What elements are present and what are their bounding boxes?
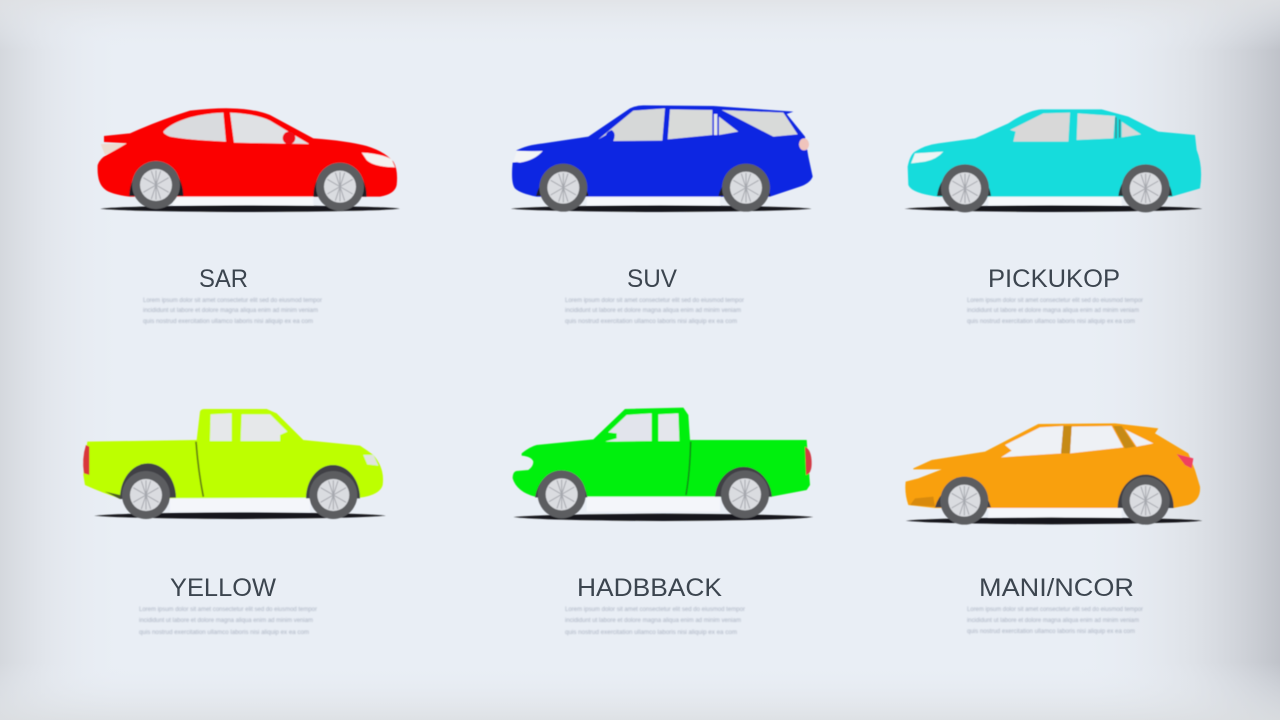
heading: YELLOW: YELLOW — [170, 574, 276, 602]
car: yellow pickup — [83, 409, 386, 519]
text block: MANIINCOR description: quis nostrud exercitation ullamco laboris nisi aliquip ex ea com — [967, 628, 1135, 635]
heading: SAR: SAR — [199, 265, 248, 293]
panel: orange hatchback — [905, 423, 1202, 635]
text block: YELLOW description — [139, 606, 318, 636]
panel: blue SUV — [511, 105, 813, 325]
text block: HADBBACK description: incididunt ut labore et dolore magna aliqua enim ad minim veniam — [565, 617, 741, 624]
text block: PICKUKOP description: incididunt ut labore et dolore magna aliqua enim ad minim veniam — [967, 307, 1139, 314]
text block: PICKUKOP description: quis nostrud exercitation ullamco laboris nisi aliquip ex ea com — [967, 318, 1135, 325]
heading: PICKUKOP: PICKUKOP — [988, 265, 1120, 293]
text block: SAR description — [143, 297, 323, 325]
car: red sedan — [98, 108, 400, 212]
text block: SUV description: incididunt ut labore et dolore magna aliqua enim ad minim veniam — [565, 307, 741, 314]
text block: YELLOW description: quis nostrud exercitation ullamco laboris nisi aliquip ex ea com — [139, 629, 309, 636]
car: cyan sedan — [904, 109, 1202, 212]
panel: red sedan — [98, 108, 400, 325]
text block: SAR description: Lorem ipsum dolor sit amet consectetur elit sed do eiusmod tempor — [143, 297, 323, 304]
text block: PICKUKOP description: Lorem ipsum dolor sit amet consectetur elit sed do eiusmod tempor — [967, 297, 1144, 304]
text block: YELLOW description: Lorem ipsum dolor sit amet consectetur elit sed do eiusmod tempor — [139, 606, 318, 613]
text block: HADBBACK description — [565, 606, 746, 636]
text block: MANIINCOR description — [967, 606, 1144, 635]
panel: yellow pickup — [83, 409, 386, 636]
car: orange hatchback — [905, 423, 1202, 525]
panel: green pickup — [513, 408, 813, 636]
car: blue SUV — [511, 105, 813, 212]
text block: MANIINCOR description: Lorem ipsum dolor sit amet consectetur elit sed do eiusmod tempor — [967, 606, 1144, 613]
text block: HADBBACK description: Lorem ipsum dolor sit amet consectetur elit sed do eiusmod tempor — [565, 606, 746, 613]
text block: SAR description: incididunt ut labore et dolore magna aliqua enim ad minim veniam — [143, 307, 318, 314]
text block: SUV description — [565, 297, 745, 325]
text block: SUV description: Lorem ipsum dolor sit amet consectetur elit sed do eiusmod tempor — [565, 297, 745, 304]
text block: SUV description: quis nostrud exercitation ullamco laboris nisi aliquip ex ea com — [565, 318, 737, 325]
panel: cyan pickup label — [904, 109, 1202, 325]
heading: MANIINCOR: MANI/NCOR — [979, 574, 1134, 602]
text block: PICKUKOP description — [967, 297, 1144, 325]
heading: SUV: SUV — [627, 265, 677, 293]
text block: HADBBACK description: quis nostrud exercitation ullamco laboris nisi aliquip ex ea com — [565, 629, 737, 636]
text block: MANIINCOR description: incididunt ut labore et dolore magna aliqua enim ad minim veniam — [967, 617, 1139, 624]
heading: HADBBACK: HADBBACK — [577, 574, 722, 602]
text block: YELLOW description: incididunt ut labore et dolore magna aliqua enim ad minim veniam — [139, 617, 313, 624]
car: green pickup — [513, 408, 813, 521]
text block: SAR description: quis nostrud exercitation ullamco laboris nisi aliquip ex ea com — [143, 318, 313, 325]
